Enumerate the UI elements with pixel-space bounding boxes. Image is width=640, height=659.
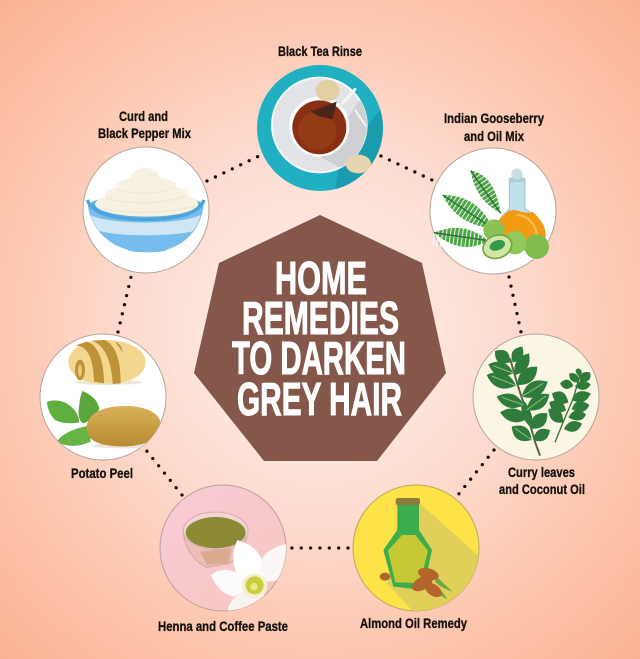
label xyxy=(499,464,585,497)
circle xyxy=(430,148,556,274)
label: Curd and xyxy=(119,108,168,124)
label xyxy=(98,108,191,141)
icon: potatoes and leaves xyxy=(47,340,161,448)
panel: indian gooseberry and oil mix xyxy=(430,110,556,274)
icon: gooseberries, fronds and oil bottle xyxy=(434,168,549,262)
label: Henna and Coffee Paste xyxy=(158,618,288,634)
panel: curry leaves and coconut oil xyxy=(473,334,599,497)
panel: potato peel xyxy=(40,334,166,481)
icon: henna bowl and white flower xyxy=(183,512,289,615)
label: Black Tea Rinse xyxy=(278,43,362,59)
icon: bowl of curd xyxy=(87,168,204,252)
icon: almond oil bottle xyxy=(380,498,487,613)
icon: curry leaf branches xyxy=(487,347,591,456)
circle xyxy=(473,334,599,460)
central heptagon with title xyxy=(194,215,446,461)
circle xyxy=(257,65,383,191)
title: GREY HAIR xyxy=(237,373,402,425)
panel: almond oil remedy xyxy=(353,485,487,631)
circle xyxy=(83,147,209,273)
title: HOME xyxy=(275,252,367,304)
panel: curd and black pepper mix xyxy=(83,108,209,273)
label: and Oil Mix xyxy=(464,128,524,144)
label: Curry leaves xyxy=(508,464,575,480)
heptagon xyxy=(194,215,446,461)
label xyxy=(444,110,544,144)
title: REMEDIES xyxy=(242,292,399,344)
label: Potato Peel xyxy=(71,465,133,481)
label: Indian Gooseberry xyxy=(444,110,544,126)
panel: black tea rinse xyxy=(257,46,383,191)
dotted connectors xyxy=(118,156,521,548)
circle xyxy=(160,485,286,611)
title xyxy=(232,252,406,425)
panel: henna and coffee paste xyxy=(158,485,289,634)
circle xyxy=(353,485,479,611)
label: and Coconut Oil xyxy=(499,481,585,497)
icon: tea cup xyxy=(271,76,383,190)
circle xyxy=(40,334,166,460)
label: Black Pepper Mix xyxy=(98,125,191,141)
label: Almond Oil Remedy xyxy=(360,615,467,631)
title: TO DARKEN xyxy=(232,332,406,384)
